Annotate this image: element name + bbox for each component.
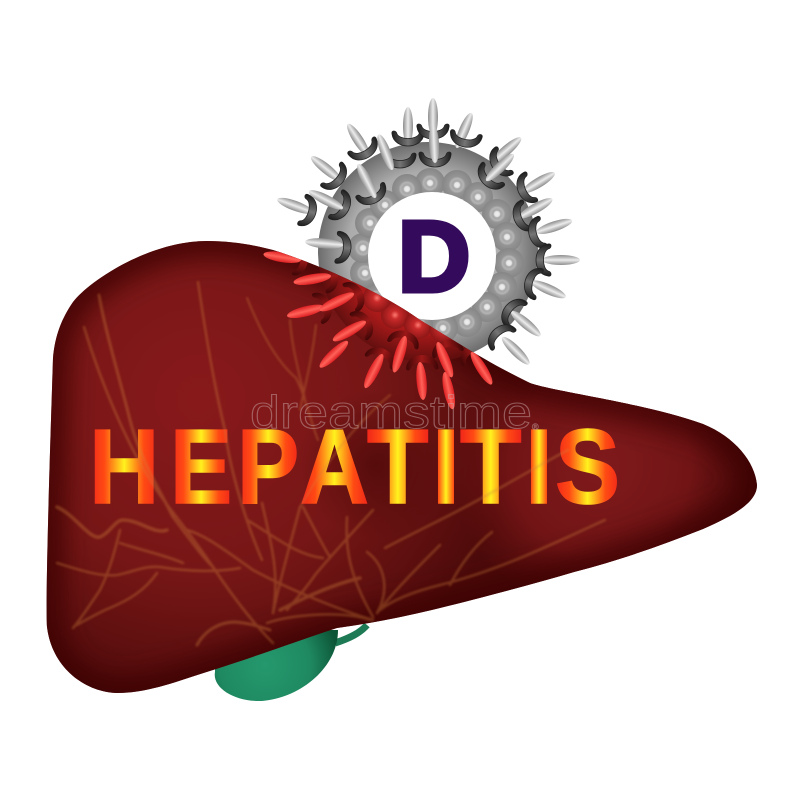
virus sphere <box>318 142 538 362</box>
right lobe highlight <box>474 372 732 584</box>
word HEPATITIS: T <box>367 407 429 526</box>
liver <box>40 235 770 700</box>
virus outer spikes and cups <box>276 98 580 368</box>
word HEPATITIS: I <box>432 407 460 526</box>
dreamstime watermark: ® <box>532 422 539 432</box>
word HEPATITIS <box>89 407 620 526</box>
gallbladder <box>215 625 367 701</box>
central shadow <box>323 410 420 516</box>
infected virus portion inside liver <box>263 251 492 410</box>
word HEPATITIS: H <box>89 407 159 526</box>
word HEPATITIS: I <box>525 407 553 526</box>
gallbladder sac <box>215 630 338 701</box>
gallbladder duct <box>335 625 367 643</box>
red surface rings <box>364 288 451 340</box>
word HEPATITIS: E <box>170 409 232 526</box>
liver base fill <box>40 235 765 700</box>
infographic: hepatitis D liver <box>46 98 757 701</box>
virus surface rings <box>348 168 524 343</box>
red virus spikes <box>263 249 496 410</box>
red virus cups <box>292 260 472 370</box>
white badge circle <box>368 192 496 320</box>
word HEPATITIS: A <box>300 408 369 526</box>
letter D: D <box>398 201 470 313</box>
liver edge shading <box>47 241 757 693</box>
liver veins <box>57 282 605 645</box>
word HEPATITIS: T <box>460 407 522 526</box>
red virus sphere <box>319 266 471 360</box>
word HEPATITIS: S <box>555 407 620 526</box>
word HEPATITIS: P <box>237 409 299 526</box>
dreamstime watermark: dreamstime <box>250 386 532 438</box>
virus particle <box>276 98 580 368</box>
